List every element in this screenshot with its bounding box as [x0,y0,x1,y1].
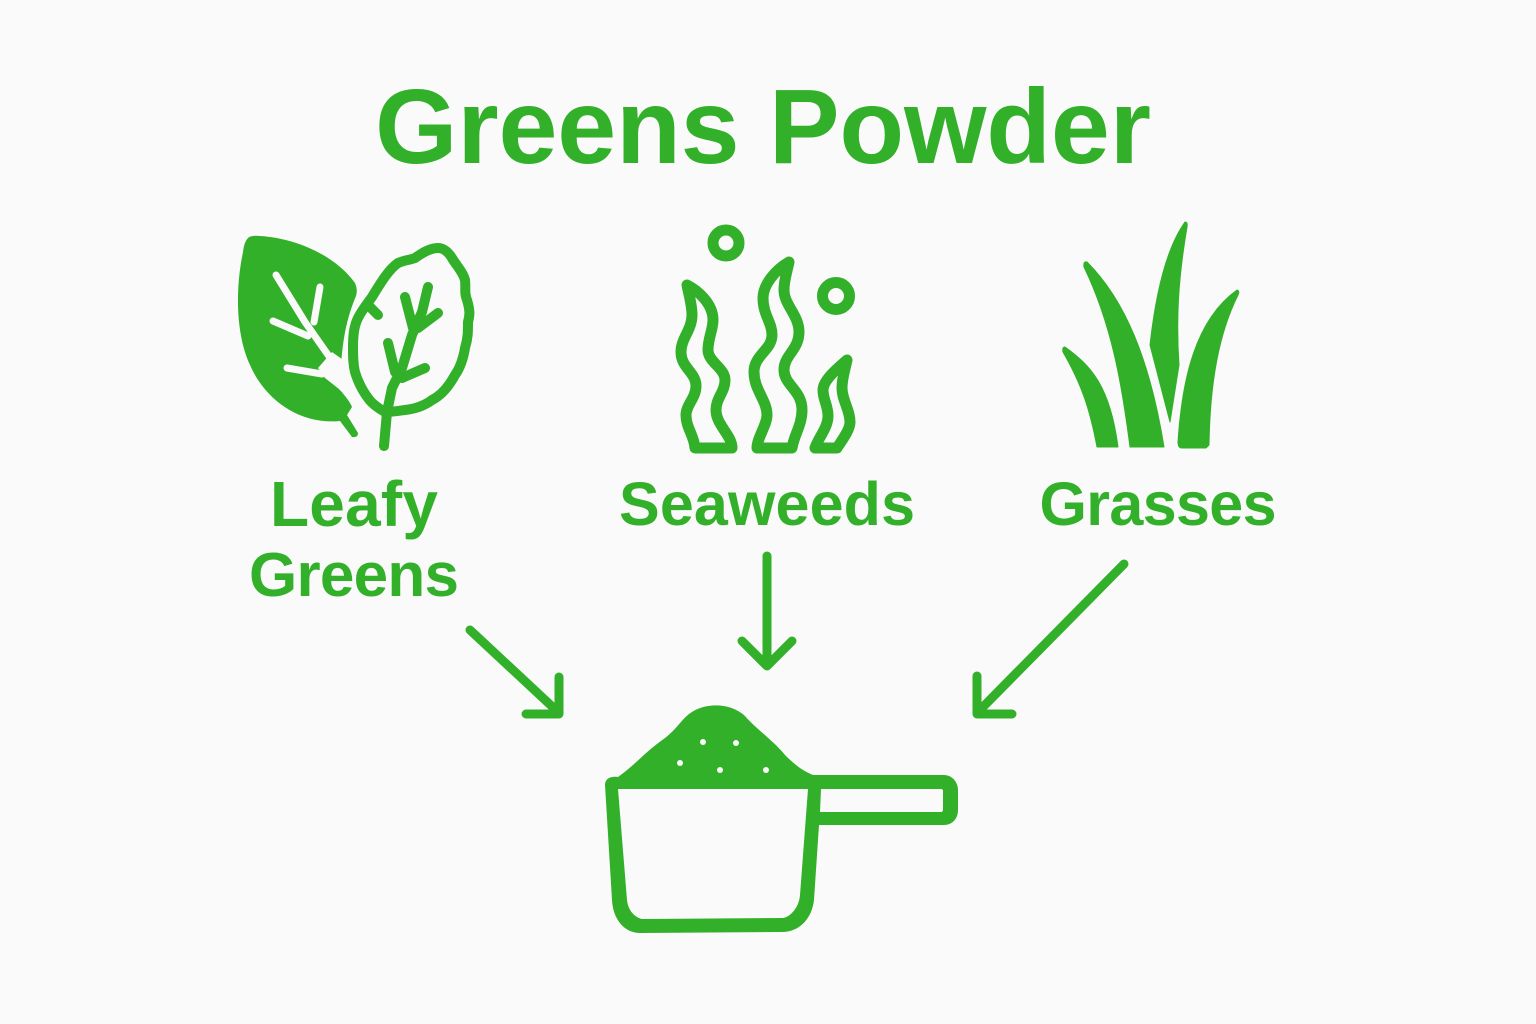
solid leaf [238,236,358,437]
label: leafy greens: Leafy [270,468,438,540]
outlined leaf [353,248,469,446]
arrow: grasses to scoop [977,564,1124,714]
icon: seaweeds [681,230,850,448]
arrow: seaweeds to scoop [742,556,792,666]
powder specks [677,739,769,773]
label: grasses: Grasses [1040,470,1276,538]
icon: leafy greens [238,236,469,446]
title: Greens Powder [375,68,1151,186]
label: seaweeds: Seaweeds [619,470,915,538]
icon: powder scoop [605,705,958,933]
label: leafy greens: Greens [249,541,459,610]
scoop with powder mound and handle [605,705,958,933]
icon: grasses [1063,222,1239,448]
arrow: leafy greens to scoop [470,630,559,714]
label: leafy greens [249,468,459,610]
